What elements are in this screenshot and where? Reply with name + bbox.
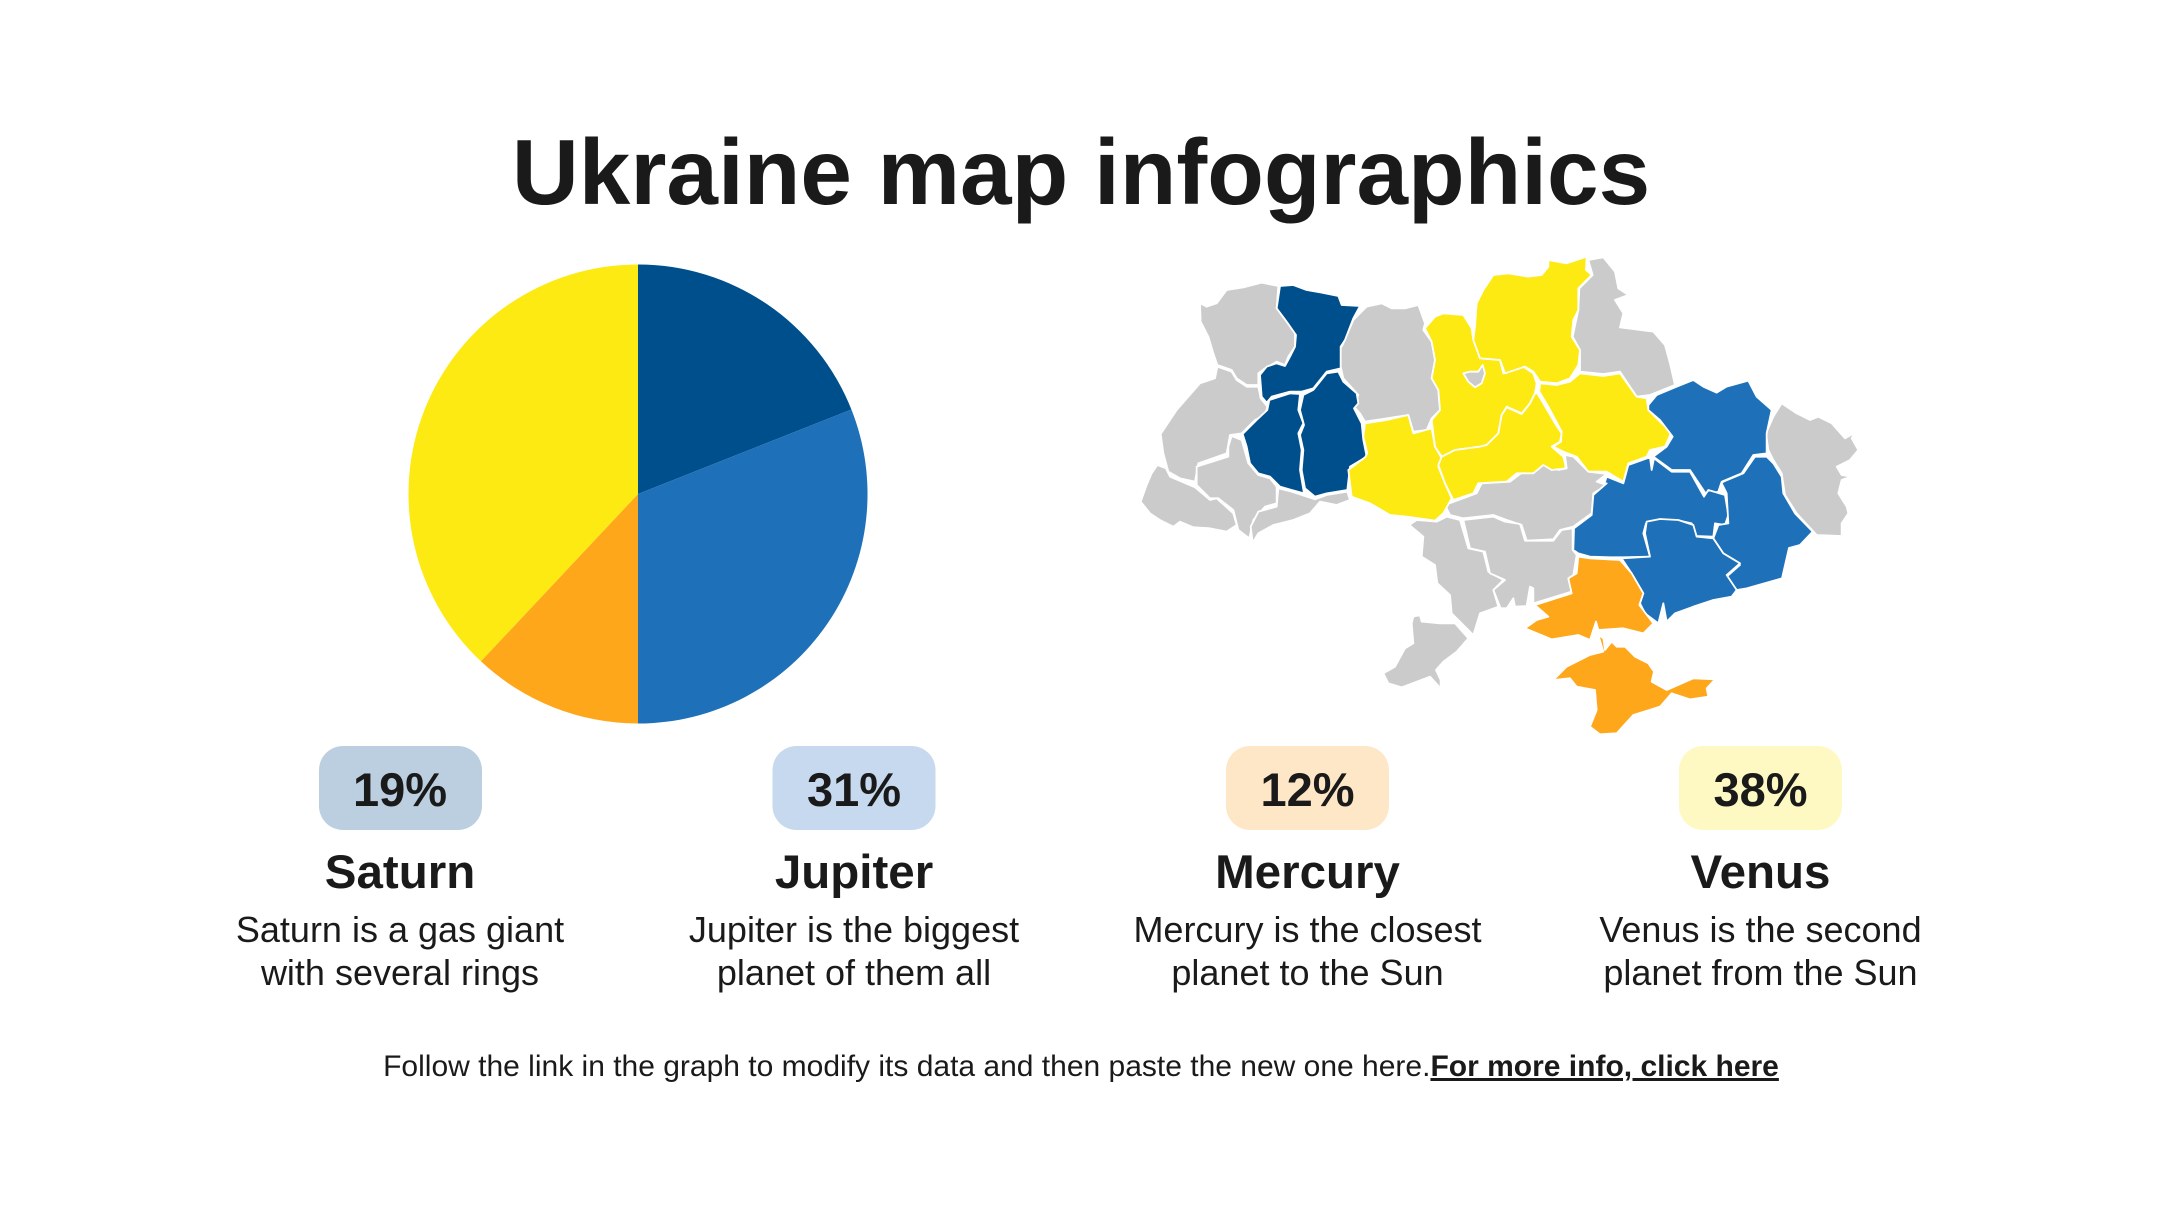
- pie slice: Mercury 12%: [481, 494, 638, 724]
- description: Mercury: planet to the Sun: [1171, 952, 1444, 993]
- description: Venus: planet from the Sun: [1603, 952, 1918, 993]
- description: Saturn: Saturn is a gas giant: [236, 909, 564, 950]
- description: Saturn: with several rings: [260, 952, 539, 993]
- map region: Kyiv city: [1463, 365, 1485, 387]
- badge: 38%: [1679, 746, 1842, 830]
- panel: Saturn: [236, 746, 564, 993]
- map regions: Mercury orange: [1525, 557, 1715, 734]
- description: Mercury: Mercury is the closest: [1133, 909, 1482, 950]
- value: 31%: 31%: [807, 763, 901, 816]
- value: 38%: 38%: [1713, 763, 1808, 816]
- description: Jupiter: planet of them all: [717, 952, 991, 993]
- heading: Saturn: Saturn: [325, 846, 475, 899]
- title: Ukraine map infographics: [512, 120, 1650, 224]
- badge: 12%: [1226, 746, 1389, 830]
- pie chart: [409, 264, 868, 724]
- pie slice: Jupiter 31%: [638, 410, 868, 724]
- map regions: Jupiter blue: [1573, 380, 1813, 623]
- value: 19%: 19%: [353, 763, 447, 816]
- footer note: Follow the link in the graph to modify its data and then paste the new one here.For more info, click here: [383, 1050, 1779, 1083]
- panel: Venus: [1599, 746, 1922, 993]
- map regions: Saturn dark blue: [1243, 285, 1367, 497]
- map regions: grey: [1141, 257, 1858, 688]
- panel: Jupiter: [689, 746, 1019, 993]
- map of Ukraine: [1141, 257, 1858, 734]
- badge: 19%: [319, 746, 482, 830]
- heading: Venus: Venus: [1691, 846, 1830, 899]
- heading: Jupiter: Jupiter: [775, 846, 933, 899]
- description: Jupiter: Jupiter is the biggest: [689, 909, 1019, 950]
- badge: 31%: [772, 746, 936, 830]
- heading: Mercury: Mercury: [1215, 846, 1400, 899]
- pie slice: Saturn 19%: [638, 264, 851, 494]
- map regions: Venus yellow: [1348, 257, 1672, 521]
- description: Venus: Venus is the second: [1599, 909, 1922, 950]
- value: 12%: 12%: [1260, 763, 1355, 816]
- pie slice: Venus 38%: [409, 264, 638, 661]
- panel: Mercury: [1133, 746, 1482, 993]
